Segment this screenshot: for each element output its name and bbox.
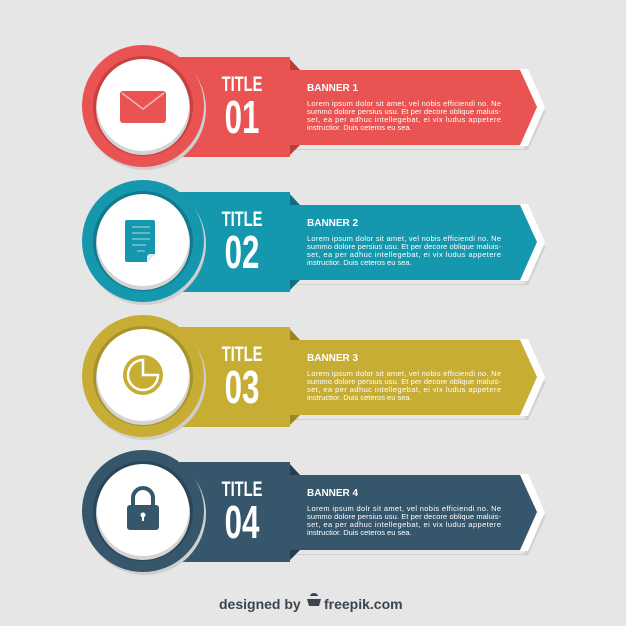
title text [222, 207, 262, 279]
banner text: Lorem ipsum dolor sit amet, vel nobis efficiendi no. Ne [307, 99, 501, 108]
banner text: summo dolore persius usu. Et per decore oblique maluis- [307, 512, 502, 521]
icon: pie chart [123, 355, 163, 395]
footer credit: designed by [219, 596, 301, 612]
banner text: BANNER 1 [307, 83, 359, 94]
title block [180, 327, 290, 427]
banner text: instructior. Duis ceteros eu sea. [307, 258, 412, 267]
banner text: instructior. Duis ceteros eu sea. [307, 528, 412, 537]
arrow band [290, 70, 537, 145]
banner text [307, 218, 502, 267]
title text [222, 477, 262, 549]
title text: TITLE [222, 72, 262, 96]
banner text: set, ea per adhuc intellegebat, ei vix ludus appetere [307, 385, 501, 394]
title block [180, 462, 290, 562]
banner text: Lorem ipsum dolor sit amet, vel nobis efficiendi no. Ne [307, 234, 501, 243]
title text: 04 [225, 497, 259, 549]
banner text: instructior. Duis ceteros eu sea. [307, 123, 412, 132]
banner text: summo dolore persius usu. Et per decore oblique maluis- [307, 377, 502, 386]
icon: padlock [127, 488, 159, 530]
banner text: summo dolore persius usu. Et per decore oblique maluis- [307, 242, 502, 251]
banner text: BANNER 3 [307, 353, 359, 364]
banner text [307, 488, 502, 537]
icon: envelope [120, 91, 166, 123]
panel: banner 4 [82, 450, 546, 575]
arrow band [290, 340, 537, 415]
arrow band [290, 205, 537, 280]
panel: banner 2 [82, 180, 546, 305]
icon: document [125, 220, 155, 262]
banner text: set, ea per adhuc intellegebat, ei vix ludus appetere [307, 250, 501, 259]
title text: TITLE [222, 207, 262, 231]
banner text: BANNER 4 [307, 488, 359, 499]
banner text: set, ea per adhuc intellegebat, ei vix ludus appetere [307, 520, 501, 529]
banner text: summo dolore persius usu. Et per decore oblique maluis- [307, 107, 502, 116]
title text: 03 [225, 362, 259, 414]
arrow band [290, 475, 537, 550]
title text: TITLE [222, 477, 262, 501]
title text: 02 [225, 227, 259, 279]
title text [222, 342, 262, 414]
banner text: Lorem ipsum dolr sit amet, vel nobis efficiendi no. Ne [307, 504, 501, 513]
banner text: Lorem ipsum dolor sit amet, vel nobis efficiendi no. Ne [307, 369, 501, 378]
banner text [307, 353, 502, 402]
title text [222, 72, 262, 144]
banner text: set, ea per adhuc intellegebat, ei vix ludus appetere [307, 115, 501, 124]
footer credit [219, 593, 403, 612]
banner text: BANNER 2 [307, 218, 359, 229]
banner text: instructior. Duis ceteros eu sea. [307, 393, 412, 402]
footer credit: freepik.com [324, 596, 403, 612]
title block [180, 192, 290, 292]
panel: banner 3 [82, 315, 546, 440]
title text: TITLE [222, 342, 262, 366]
banner text [307, 83, 502, 132]
panel: banner 1 [82, 45, 546, 170]
title block [180, 57, 290, 157]
title text: 01 [225, 92, 259, 144]
